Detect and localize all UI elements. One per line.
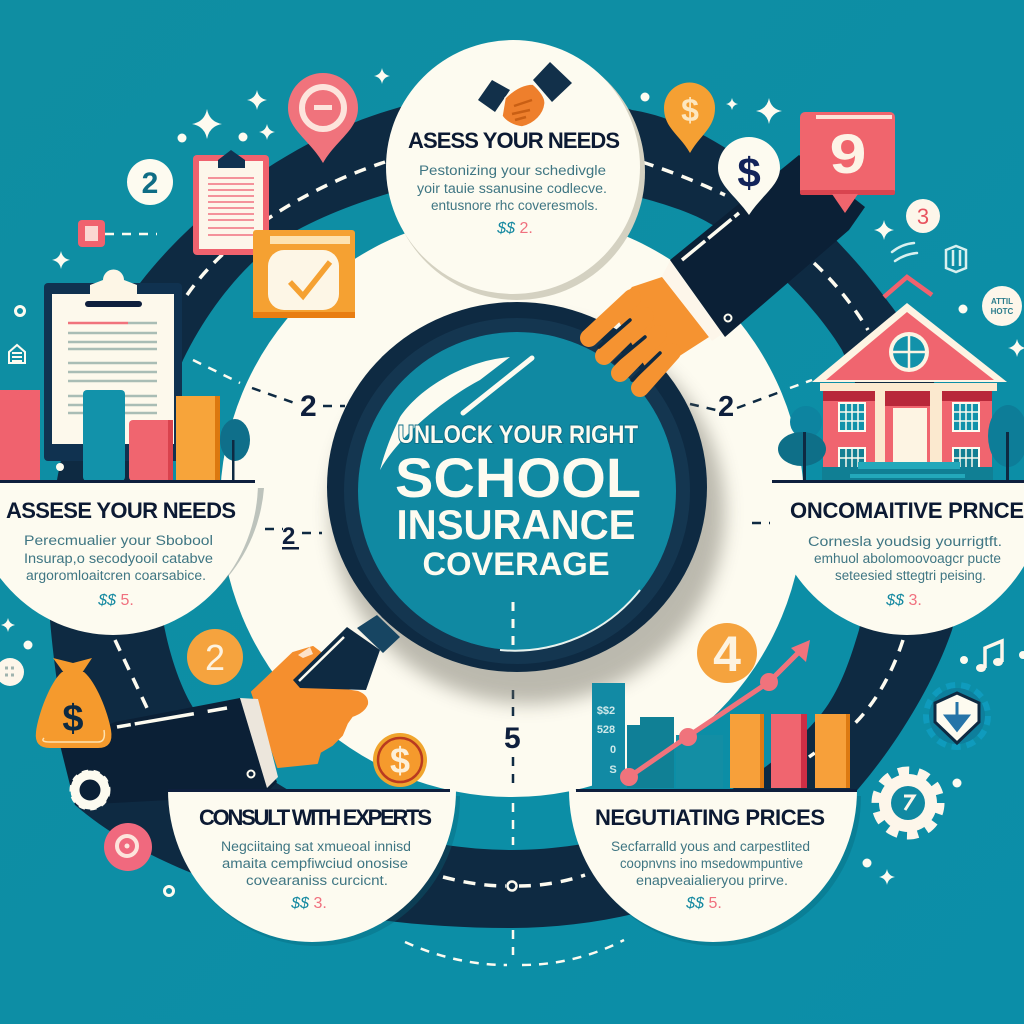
panel: consult with experts: amaita cempfiwciud onosise: [222, 856, 408, 871]
panel: left assess your needs: $$ 5.: [97, 592, 134, 609]
icon: orange dollar pin: [664, 83, 715, 153]
icon: number 4 badge: 4: [713, 626, 741, 682]
panel: right oncomaitive prnce: $$ 3.: [885, 592, 922, 609]
title: INSURANCE: [396, 501, 636, 548]
title: SCHOOL: [395, 446, 641, 509]
lens highlight: [380, 357, 532, 470]
panel: top assess your needs: $$ 2.: [496, 220, 533, 237]
dashed connectors with numbers: [105, 234, 812, 965]
icon: number 2 badge: [127, 159, 173, 205]
magnifier collar: [357, 615, 400, 653]
magnifier grip: [293, 627, 380, 690]
icon: pink location pin: [288, 73, 358, 163]
icon: pink speech bubble: [800, 112, 895, 213]
panel: left assess your needs: ASSESE YOUR NEEDS: [6, 498, 236, 523]
icon: text badge: [982, 286, 1022, 326]
icon: school right tree: [988, 405, 1024, 480]
icon: small cream gear: [72, 772, 108, 808]
icon: large clipboard: [44, 270, 182, 461]
icon: small house: [9, 345, 25, 363]
road centre dashes: [115, 162, 903, 886]
panel: left assess your needs: Insurap,o secodyooil catabve: [24, 551, 213, 566]
dashed connectors with numbers: 2: [718, 391, 734, 423]
icon: text badge: ATTIL: [991, 297, 1013, 306]
icon: money bag: [36, 658, 111, 748]
hand: [252, 647, 367, 767]
icon: gold coin: $: [390, 740, 410, 781]
panel: right oncomaitive prnce: [767, 480, 1024, 635]
icon: music note heads: [976, 658, 1003, 672]
upper right arm and hand: [589, 155, 865, 388]
icon: number 4 badge: [697, 623, 757, 683]
panel: negotiating prices: NEGUTIATING PRICES: [595, 805, 825, 830]
hand: [589, 277, 709, 388]
fingernail: [298, 647, 313, 658]
panel: consult with experts: Negciitaing sat xmueoal innisd: [221, 839, 411, 854]
panel: consult with experts: CONSULT WITH EXPERTS: [199, 805, 432, 830]
icon: orange folder with check: [253, 230, 355, 318]
lower left arm and hand: [60, 627, 380, 805]
icon: text badge: HOTC: [991, 307, 1014, 316]
title: COVERAGE: [422, 546, 610, 582]
cuff: [662, 261, 722, 341]
panel: consult with experts: [168, 789, 460, 946]
big cream circle: [220, 213, 804, 797]
icon: number 2 orange badge: [187, 629, 243, 685]
magnifying glass: [327, 302, 707, 672]
icon: pink speech bubble: 9: [830, 122, 866, 185]
title: [395, 421, 641, 582]
dashed connectors with numbers: 2: [300, 390, 317, 423]
panel: negotiating prices: coopnvns ino msedowmpuntive: [620, 856, 803, 871]
panel: negotiating prices: Secfarralld yous and carpestlited: [611, 839, 810, 854]
icon: cream dollar pin: $: [737, 149, 761, 196]
icon: orange dollar pin: $: [681, 92, 699, 128]
panel: top assess your needs: ASESS YOUR NEEDS: [408, 128, 620, 153]
icon: cream dollar pin: [718, 137, 780, 215]
panel: right oncomaitive prnce: Cornesla youdsig yourrigtft.: [808, 534, 1002, 549]
icon: number 3 badge: [906, 199, 940, 233]
panel: negotiating prices: $$ 5.: [685, 895, 722, 912]
panel: consult with experts: covearaniss curcicnt.: [246, 873, 388, 888]
rising arrow: [620, 640, 810, 786]
panel: top assess your needs: [386, 40, 645, 300]
icon: signal lines: [892, 243, 917, 261]
chart: rising price bars: [592, 683, 850, 788]
dashed connectors with numbers: 2: [282, 523, 295, 550]
chart: rising price bars: 0: [610, 744, 616, 756]
panel: right oncomaitive prnce: ONCOMAITIVE PRNCE: [790, 498, 1024, 523]
chart: rising price bars: 528: [597, 724, 615, 736]
panel: negotiating prices: enapveaialieryou prirve.: [636, 873, 788, 888]
icon: small button: [0, 658, 24, 686]
chart: rising price bars: $$2: [597, 705, 615, 717]
magnifier shadow: [331, 320, 725, 704]
panel: negotiating prices: [569, 789, 861, 946]
road centre ring: [508, 882, 516, 890]
panel: consult with experts: $$ 3.: [290, 895, 327, 912]
panel: left assess your needs: argoromloaitcren coarsabice.: [26, 568, 206, 583]
icon: number 2 badge: 2: [142, 167, 158, 200]
title: UNLOCK YOUR RIGHT: [398, 421, 638, 449]
icon: music note: [985, 641, 1002, 668]
icon: cream gear: [876, 771, 940, 835]
icon: number 2 orange badge: 2: [205, 637, 225, 678]
road ring: [48, 90, 965, 928]
panel: right oncomaitive prnce: seteesied sttegtri peising.: [835, 568, 986, 583]
icon: school left tree: [778, 406, 826, 480]
chart: rising price bars: S: [609, 764, 617, 776]
icon: pink clipboard: [193, 150, 269, 255]
chart: left bars: [0, 390, 220, 481]
icon: number 3 badge: 3: [917, 204, 929, 229]
panel: left assess your needs: Perecmualier your Sbobool: [24, 533, 213, 548]
panel: top assess your needs: Pestonizing your schedivgle: [419, 163, 606, 178]
icon: shield gear badge: [926, 685, 988, 747]
sleeve: [670, 155, 865, 337]
icon: pink target: [104, 823, 152, 871]
panel: right oncomaitive prnce: emhuol abolomoovoagcr pucte: [814, 551, 1001, 566]
icon: gold coin: [373, 733, 427, 787]
panel: top assess your needs: yoir tauie ssanusine codlecve.: [417, 181, 607, 196]
panel: top assess your needs: entusnore rhc coveresmols.: [431, 198, 598, 213]
icon: left tree: [220, 419, 250, 480]
icon: handshake: [478, 62, 572, 127]
panel: left assess your needs: [0, 480, 264, 635]
icon: small pink square: [78, 220, 105, 247]
icon: money bag: $: [62, 698, 84, 740]
dashed connectors with numbers: 5: [504, 722, 521, 755]
icon: school building: [812, 277, 1007, 481]
sleeve: [60, 698, 277, 805]
cuff: [240, 698, 278, 788]
icon: map outline: [946, 246, 966, 272]
